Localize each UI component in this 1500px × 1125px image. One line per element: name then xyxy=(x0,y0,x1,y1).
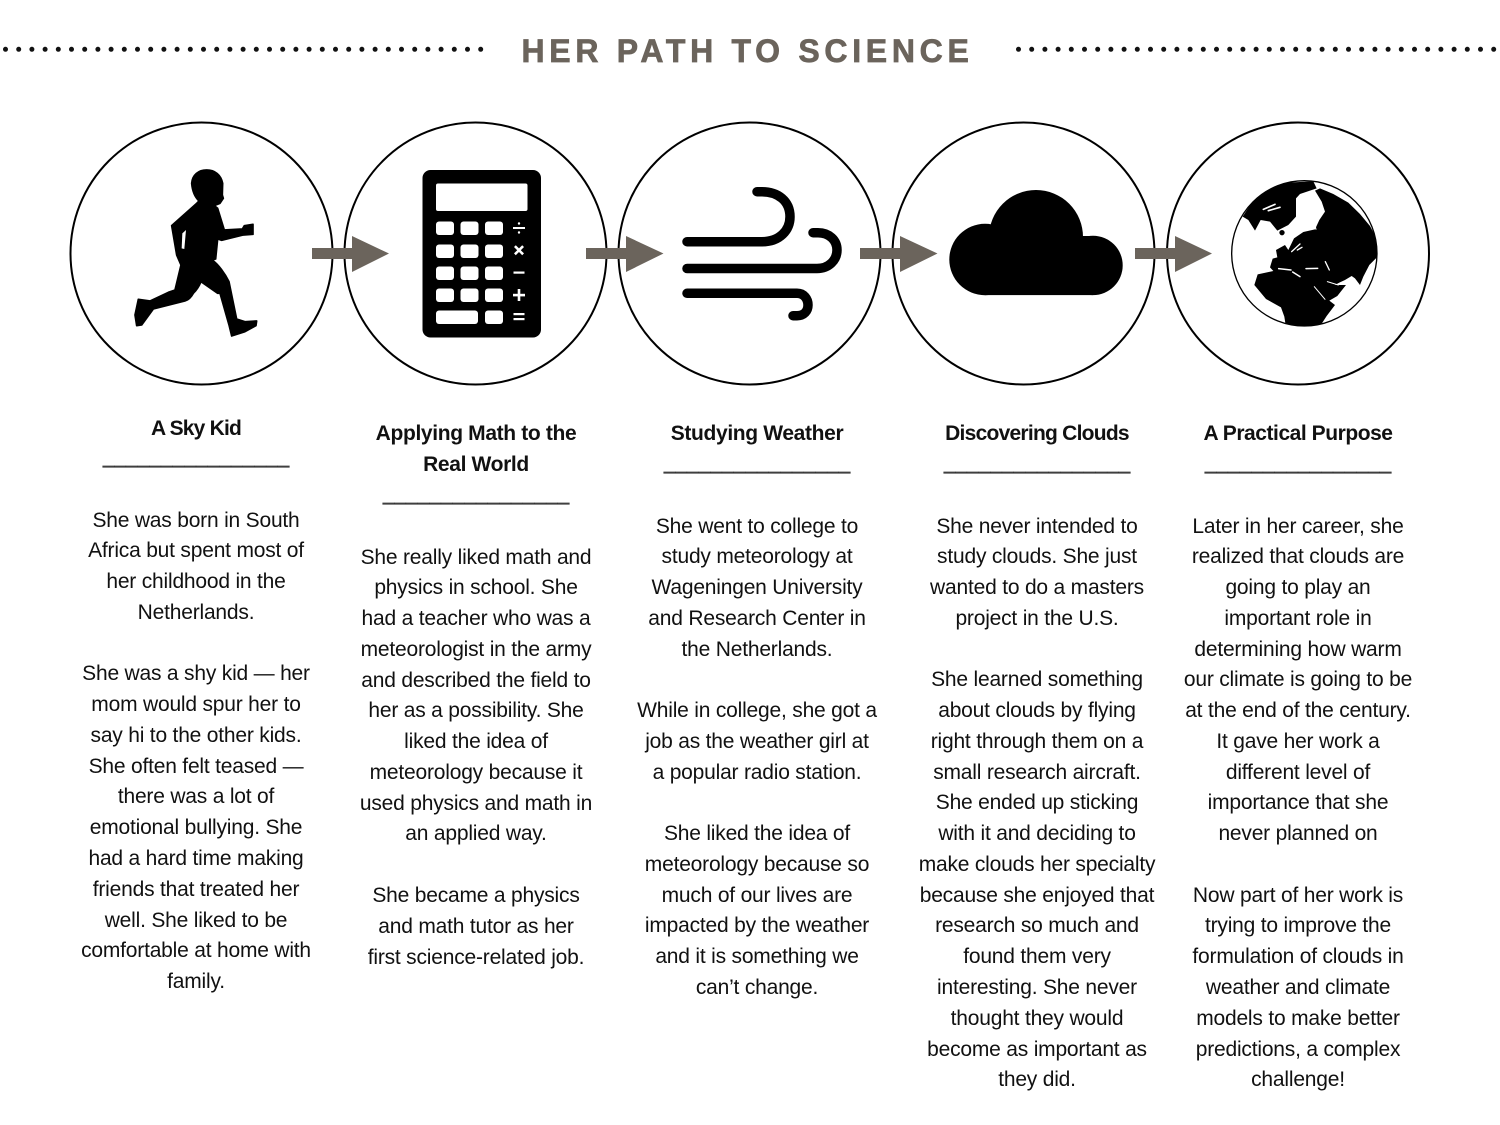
column 1 body: comfortable at home with xyxy=(81,939,311,962)
circle 2 xyxy=(344,122,606,384)
column 3 body: She went to college to xyxy=(656,514,858,538)
column 3 body: much of our lives are xyxy=(662,884,852,907)
column 3 body: study meteorology at xyxy=(662,545,852,568)
arrow 4 xyxy=(1135,236,1212,272)
column 3 heading: Studying Weather: Studying Weather xyxy=(671,422,843,445)
column 5 body: weather and climate xyxy=(1206,976,1390,999)
column 1 body: She often felt teased — xyxy=(89,755,303,778)
column 4 body: wanted to do a masters xyxy=(930,576,1144,599)
column 2 body: liked the idea of xyxy=(404,730,548,753)
infographic artwork xyxy=(3,46,1496,386)
column 1 body: say hi to the other kids. xyxy=(91,724,301,747)
column 5 body: models to make better xyxy=(1196,1007,1400,1030)
column 4 body: She learned something xyxy=(931,668,1143,691)
column 5 body: our climate is going to be xyxy=(1184,668,1412,691)
column 3 body: a popular radio station. xyxy=(653,761,861,784)
column 3 body: impacted by the weather xyxy=(645,914,869,937)
column 5 body: Later in her career, she xyxy=(1192,514,1404,538)
column 4 body xyxy=(919,514,1156,1091)
column 5 body: important role in xyxy=(1224,607,1372,630)
column 4 body: because she enjoyed that xyxy=(920,884,1154,907)
column 3 heading: Studying Weather xyxy=(663,422,851,475)
column 2 body: meteorology because it xyxy=(370,761,582,784)
column 3 body: can’t change. xyxy=(696,976,818,999)
column 2 heading: Applying Math to the Real World xyxy=(376,422,576,506)
column 4 body: She ended up sticking xyxy=(936,791,1138,814)
column 5 body: formulation of clouds in xyxy=(1192,945,1404,968)
column 1 body: there was a lot of xyxy=(118,785,274,808)
column 2 body: and math tutor as her xyxy=(378,915,574,938)
column 1 body xyxy=(81,509,311,993)
column 2 body: and described the field to xyxy=(361,669,591,692)
circle 4 xyxy=(892,122,1154,384)
column 4 body: study clouds. She just xyxy=(937,545,1137,568)
column 4 body: thought they would xyxy=(951,1007,1123,1030)
column 4 body: small research aircraft. xyxy=(933,761,1141,784)
column 1 body: had a hard time making xyxy=(88,847,304,870)
column 5 body: at the end of the century. xyxy=(1185,699,1411,722)
column 5 body: realized that clouds are xyxy=(1192,545,1404,568)
dotted rule right xyxy=(1018,47,1494,52)
column 2 body: had a teacher who was a xyxy=(362,607,590,630)
column 5 heading: A Practical Purpose: ________________ xyxy=(1205,452,1391,475)
column 1 body: emotional bullying. She xyxy=(90,816,302,839)
column 1 body: friends that treated her xyxy=(93,878,299,901)
arrow 2 xyxy=(586,236,664,272)
column 5 body: going to play an xyxy=(1225,576,1371,599)
column 4 body: with it and deciding to xyxy=(938,822,1136,845)
icon: globe xyxy=(1232,181,1378,327)
column 1 body: well. She liked to be xyxy=(105,909,287,932)
column 1 heading: A Sky Kid: ________________ xyxy=(103,446,289,469)
column 2 body: meteorologist in the army xyxy=(361,638,591,661)
column 4 heading: Discovering Clouds: Discovering Clouds xyxy=(945,422,1129,445)
column 5 body: determining how warm xyxy=(1194,638,1402,661)
column 2 heading: Applying Math to the Real World: Applying Math to the xyxy=(376,422,576,445)
column 5 body xyxy=(1184,514,1412,1091)
column 4 body: become as important as xyxy=(927,1038,1147,1061)
column 3 body: While in college, she got a xyxy=(637,699,877,722)
arrow 3 xyxy=(860,236,938,272)
column 1 heading: A Sky Kid xyxy=(102,417,290,469)
icon: calculator xyxy=(422,170,541,338)
column 3 body: and it is something we xyxy=(655,945,859,968)
column 2 body: her as a possibility. She xyxy=(368,699,584,722)
circle 1 xyxy=(70,122,332,384)
column 5 body: It gave her work a xyxy=(1216,730,1380,753)
column 5 body: importance that she xyxy=(1208,791,1388,814)
column 5 body: predictions, a complex xyxy=(1196,1038,1400,1061)
column 3 body: the Netherlands. xyxy=(682,638,832,661)
circle 3 xyxy=(618,122,880,384)
column 5 heading: A Practical Purpose xyxy=(1203,422,1393,475)
column 4 body: right through them on a xyxy=(931,730,1143,753)
column 4 body: project in the U.S. xyxy=(955,607,1119,630)
column 1 heading: A Sky Kid: A Sky Kid xyxy=(151,417,241,440)
column 1 body: mom would spur her to xyxy=(91,693,301,716)
column 3 body: meteorology because so xyxy=(645,853,869,876)
column 4 body: interesting. She never xyxy=(937,976,1137,999)
column 1 body: Africa but spent most of xyxy=(88,539,304,562)
column 4 body: research so much and xyxy=(935,914,1139,937)
title: HER PATH TO SCIENCE xyxy=(521,33,974,69)
column 4 body: about clouds by flying xyxy=(938,699,1136,722)
column 2 body: an applied way. xyxy=(405,822,547,845)
column 4 body: found them very xyxy=(963,945,1111,968)
column 3 body: She liked the idea of xyxy=(664,822,850,845)
column 4 body: She never intended to xyxy=(936,514,1138,538)
column 5 body: challenge! xyxy=(1251,1068,1345,1091)
column 1 body: her childhood in the xyxy=(106,570,286,593)
icon: running child xyxy=(135,170,257,336)
column 4 body: make clouds her specialty xyxy=(919,853,1155,876)
column 2 body: used physics and math in xyxy=(360,792,592,815)
column 1 body: Netherlands. xyxy=(138,601,254,624)
column 4 body: they did. xyxy=(998,1068,1076,1091)
column 5 body: different level of xyxy=(1226,761,1370,784)
column 2 body: physics in school. She xyxy=(374,576,578,599)
column 2 body: first science-related job. xyxy=(368,946,584,969)
column 2 body: She really liked math and xyxy=(361,546,591,569)
column 3 body: Wageningen University xyxy=(652,576,862,599)
arrow 1 xyxy=(312,236,389,272)
column 5 body: never planned on xyxy=(1218,822,1378,845)
column 2 heading: Applying Math to the Real World: Real World xyxy=(423,453,529,476)
column 1 body: family. xyxy=(167,970,225,993)
icon: wind xyxy=(687,192,837,316)
column 2 body: She became a physics xyxy=(372,884,580,907)
column 1 body: She was born in South xyxy=(92,509,300,532)
dotted rule left xyxy=(6,47,481,52)
column 4 heading: Discovering Clouds: ________________ xyxy=(944,452,1130,475)
icon: cloud xyxy=(949,190,1123,295)
column 3 body xyxy=(637,514,878,999)
column 2 body xyxy=(360,546,592,969)
column 5 body: trying to improve the xyxy=(1205,914,1391,937)
column 3 body: and Research Center in xyxy=(648,607,866,630)
column 1 body: She was a shy kid — her xyxy=(82,662,310,685)
column 2 heading: Applying Math to the Real World: ________________ xyxy=(383,483,569,506)
column 5 body: Now part of her work is xyxy=(1193,884,1403,907)
column 3 body: job as the weather girl at xyxy=(645,730,869,753)
column 3 heading: Studying Weather: ________________ xyxy=(664,452,850,475)
circle 5 xyxy=(1167,122,1429,384)
column 4 heading: Discovering Clouds xyxy=(943,422,1131,475)
column 5 heading: A Practical Purpose: A Practical Purpose xyxy=(1203,422,1393,445)
